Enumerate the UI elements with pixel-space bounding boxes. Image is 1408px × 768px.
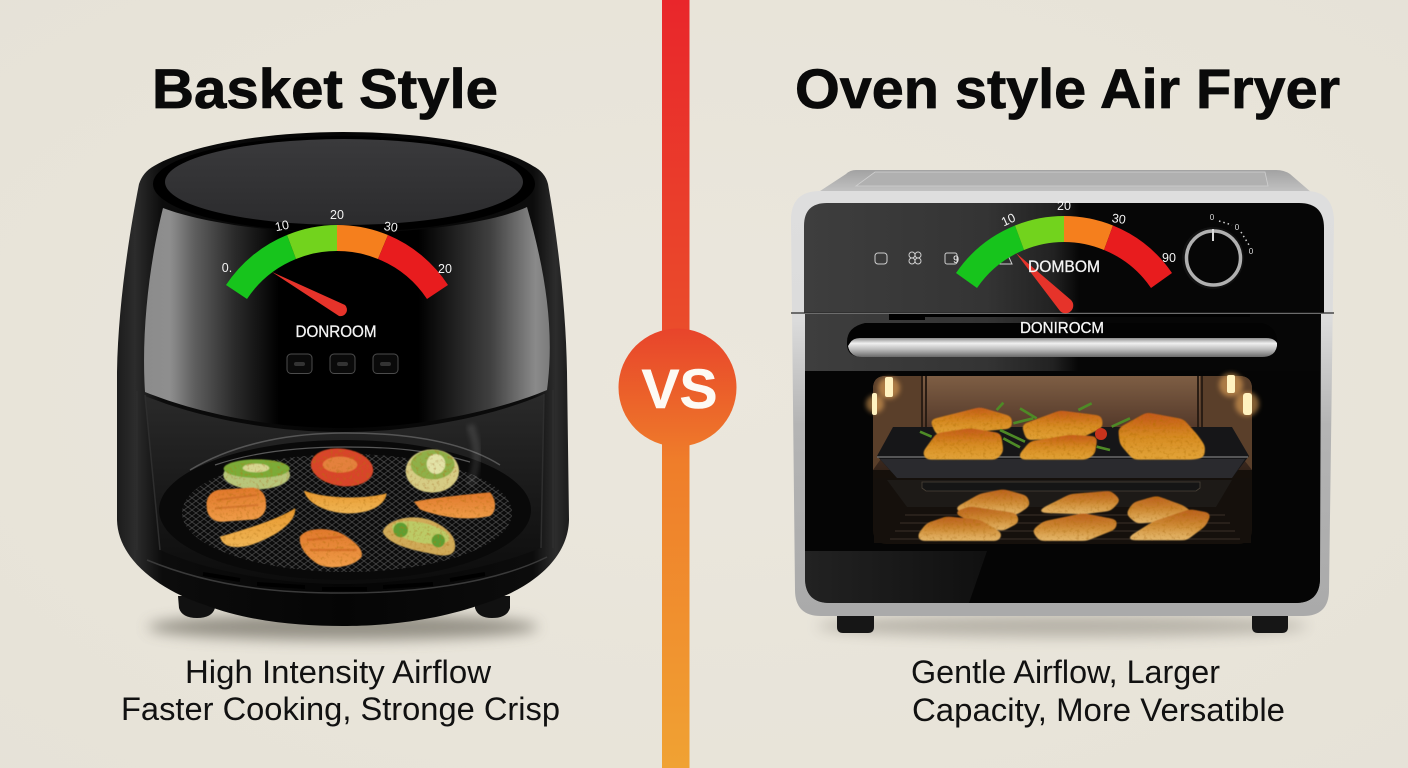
lower rear middle food (1034, 491, 1121, 514)
lower front middle food (1032, 513, 1117, 541)
oven lights (872, 375, 1252, 415)
tomato garnish (1095, 428, 1107, 440)
gauge scale labels: 20 (330, 208, 344, 222)
steam (470, 425, 477, 485)
stuffed piece (383, 517, 455, 555)
temperature knob: 0 (1210, 213, 1215, 222)
upper foods (918, 407, 1211, 541)
caption: basket style benefits: Faster Cooking, Stronge Crisp (121, 691, 560, 727)
gauge (956, 199, 1176, 313)
handle caption: DONIROCM (1020, 320, 1104, 337)
top plate (817, 170, 1312, 193)
caption: basket style benefits: High Intensity Airflow (185, 654, 492, 690)
handle (847, 323, 1277, 357)
illustration: basket air fryer (117, 132, 569, 640)
gauge scale labels: 10 (999, 211, 1018, 229)
window frame lines (137, 390, 553, 550)
lower front panel (805, 314, 1321, 603)
VS badge (618, 328, 736, 446)
gauge scale labels: 20 (1057, 199, 1071, 213)
bottom black area (960, 551, 1320, 603)
gauge needle (272, 272, 347, 316)
gauge (222, 208, 452, 341)
orange right piece (414, 492, 495, 518)
upper glossy body (144, 207, 550, 428)
light glow (866, 373, 1259, 416)
gauge scale labels: 20 (438, 262, 452, 276)
gauge caption: DONROOM (296, 323, 376, 341)
lower rear right food (1126, 496, 1194, 523)
gauge scale labels (222, 208, 452, 276)
lower front right food (1124, 509, 1211, 540)
title: Oven style Air Fryer: Oven style Air Fryer (795, 57, 1340, 120)
caption: basket style benefits (121, 654, 560, 727)
basket tray (159, 440, 531, 580)
herb garnish (920, 403, 1130, 450)
feet (837, 610, 1288, 633)
temperature knob: 0 (1249, 247, 1254, 256)
floor shadow (817, 615, 1307, 637)
back wall (873, 376, 1252, 470)
tray rim (877, 456, 1248, 458)
panel seam (791, 312, 1334, 314)
caption: oven style benefits (911, 654, 1285, 728)
oven window (866, 373, 1259, 544)
rear lower panel (887, 480, 1232, 507)
bottom reflection (805, 551, 987, 603)
lower front left food (918, 517, 1002, 541)
center divider bar (662, 0, 690, 768)
right food (1118, 413, 1205, 459)
gauge scale labels: 90 (1162, 251, 1176, 265)
lid (165, 139, 523, 225)
tomato slice (308, 444, 376, 490)
control buttons (287, 354, 398, 374)
lower oven cavity (874, 478, 1251, 543)
green round (406, 449, 459, 493)
grilled piece (300, 529, 362, 567)
vents (203, 574, 485, 589)
green slice (223, 459, 290, 489)
temperature knob (1182, 213, 1254, 289)
drawer window (145, 394, 544, 584)
lower rack (890, 515, 1240, 539)
gauge scale labels: 30 (1111, 211, 1127, 227)
silver shell (791, 191, 1334, 616)
top plate inset (856, 172, 1268, 186)
mesh (182, 454, 512, 572)
lower rear left food (953, 489, 1030, 515)
rail (922, 482, 1200, 491)
tray top highlights (190, 433, 500, 470)
gauge scale labels (999, 199, 1176, 265)
orange piece left (206, 487, 267, 523)
rear middle food (1022, 411, 1103, 440)
illustration: oven air fryer (791, 170, 1334, 637)
lower lip (147, 557, 547, 593)
food pieces (206, 444, 495, 567)
handle recess tab (889, 314, 1250, 320)
side walls (873, 376, 922, 470)
body silhouette (117, 132, 569, 626)
touch icons (875, 252, 1012, 264)
lid recess (153, 136, 535, 232)
VS badge: VS (642, 357, 718, 420)
rear left food (930, 407, 1012, 435)
gauge scale labels: 30 (383, 219, 399, 235)
control panel (804, 203, 1324, 313)
caption: oven style benefits: Gentle Airflow, Larger (911, 654, 1220, 690)
stray icon label: 9 (953, 254, 959, 266)
black window band (805, 371, 1320, 551)
temperature knob: 0 (1235, 223, 1240, 232)
gauge scale labels: 10 (274, 218, 290, 234)
lower mid left food (953, 507, 1019, 531)
caption: oven style benefits: Capacity, More Versatible (912, 692, 1285, 728)
gauge needle (1016, 253, 1073, 313)
feet (178, 596, 510, 618)
upper tray (877, 427, 1249, 478)
front left food (923, 428, 1003, 459)
title: Basket Style: Basket Style (152, 57, 498, 120)
tray front band (880, 459, 1245, 478)
floor shadow (148, 614, 538, 640)
gauge scale labels: 0. (222, 261, 232, 275)
crescent wedge (304, 491, 387, 513)
gauge caption: DOMBOM (1028, 258, 1100, 276)
long wedge (220, 508, 295, 547)
wall columns (922, 376, 1202, 430)
front middle food (1018, 435, 1097, 459)
